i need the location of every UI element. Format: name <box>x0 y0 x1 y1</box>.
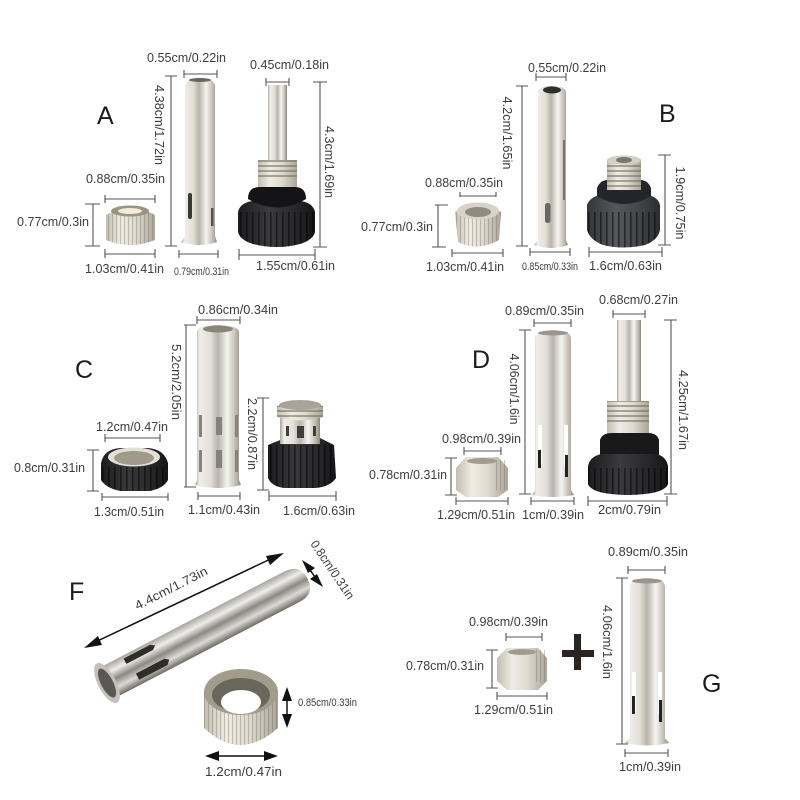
A labels: 1.55cm/0.61in <box>256 259 335 273</box>
D labels: 4.06cm/1.6in <box>507 354 521 425</box>
A nut <box>106 206 155 245</box>
A labels: 4.3cm/1.69in <box>322 126 336 198</box>
C labels: 1.1cm/0.43in <box>188 503 260 517</box>
F labels: 0.8cm/0.31in <box>308 538 357 602</box>
G plus sign <box>562 634 594 670</box>
G labels <box>406 545 688 774</box>
F arrows <box>84 553 323 761</box>
panel: D <box>369 293 690 522</box>
C labels: 5.2cm/2.05in <box>169 344 183 420</box>
C holder <box>268 400 336 488</box>
F labels <box>132 538 357 779</box>
D labels: 0.68cm/0.27in <box>599 293 678 307</box>
label A: A <box>97 102 114 130</box>
panel: C <box>14 303 355 519</box>
B dimensions <box>432 73 671 257</box>
F labels: 0.85cm/0.33in <box>298 697 357 709</box>
C nut <box>101 448 168 491</box>
D labels: 0.78cm/0.31in <box>369 468 447 482</box>
B labels <box>361 61 687 274</box>
D labels: 1.29cm/0.51in <box>437 508 515 522</box>
label B: B <box>659 100 676 128</box>
A holder <box>238 85 315 247</box>
B nut <box>455 202 501 247</box>
G labels: 1cm/0.39in <box>619 760 681 774</box>
G labels: 0.98cm/0.39in <box>469 615 548 629</box>
B holder <box>587 156 660 248</box>
B labels: 1.9cm/0.75in <box>673 166 687 240</box>
D labels: 0.89cm/0.35in <box>505 304 584 318</box>
C labels: 1.6cm/0.63in <box>283 504 355 518</box>
D nut <box>456 457 508 497</box>
B labels: 0.85cm/0.33in <box>522 261 578 273</box>
label G: G <box>702 670 721 698</box>
A labels: 4.38cm/1.72in <box>152 85 166 165</box>
C labels: 0.86cm/0.34in <box>198 303 278 317</box>
label C: C <box>75 356 93 384</box>
A sleeve <box>181 78 217 245</box>
A labels: 0.88cm/0.35in <box>86 172 165 186</box>
label D: D <box>472 346 490 374</box>
A labels: 0.79cm/0.31in <box>174 266 229 278</box>
B labels: 1.03cm/0.41in <box>426 260 504 274</box>
D labels: 2cm/0.79in <box>598 503 661 517</box>
D labels <box>369 293 690 522</box>
label F: F <box>69 578 84 606</box>
B labels: 0.88cm/0.35in <box>425 176 503 190</box>
G sleeve <box>625 578 669 746</box>
B labels: 4.2cm/1.65in <box>500 96 514 170</box>
C dimensions <box>87 316 336 501</box>
F sleeve <box>89 559 318 707</box>
C labels: 0.8cm/0.31in <box>14 461 85 475</box>
D sleeve <box>532 330 574 497</box>
panel: F <box>69 538 357 779</box>
A labels <box>17 51 336 278</box>
A dimensions <box>85 70 327 260</box>
A labels: 0.55cm/0.22in <box>147 51 226 65</box>
D labels: 0.98cm/0.39in <box>442 432 521 446</box>
G dimensions <box>486 566 668 757</box>
panel: B <box>361 61 687 274</box>
A labels: 1.03cm/0.41in <box>85 262 164 276</box>
D holder <box>588 320 668 495</box>
panel: G <box>406 545 721 774</box>
A labels: 0.45cm/0.18in <box>250 58 329 72</box>
B labels: 0.55cm/0.22in <box>528 61 606 75</box>
B labels: 1.6cm/0.63in <box>589 259 662 273</box>
C sleeve <box>195 325 241 488</box>
G nut <box>497 648 547 690</box>
panel: A <box>17 51 336 278</box>
B labels: 0.77cm/0.3in <box>361 220 433 234</box>
F nut <box>204 669 278 745</box>
G labels: 1.29cm/0.51in <box>474 703 553 717</box>
F labels: 4.4cm/1.73in <box>132 564 210 613</box>
G labels: 0.89cm/0.35in <box>608 545 688 559</box>
D labels: 4.25cm/1.67in <box>676 370 690 450</box>
A labels: 0.77cm/0.3in <box>17 215 89 229</box>
C labels <box>14 303 355 519</box>
G labels: 0.78cm/0.31in <box>406 659 484 673</box>
C labels: 2.2cm/0.87in <box>245 398 259 470</box>
F labels: 1.2cm/0.47in <box>205 765 282 779</box>
D labels: 1cm/0.39in <box>522 508 584 522</box>
B sleeve <box>534 86 568 248</box>
D dimensions <box>445 310 677 506</box>
G labels: 4.06cm/1.6in <box>600 605 614 679</box>
C labels: 1.2cm/0.47in <box>96 420 168 434</box>
C labels: 1.3cm/0.51in <box>94 505 164 519</box>
